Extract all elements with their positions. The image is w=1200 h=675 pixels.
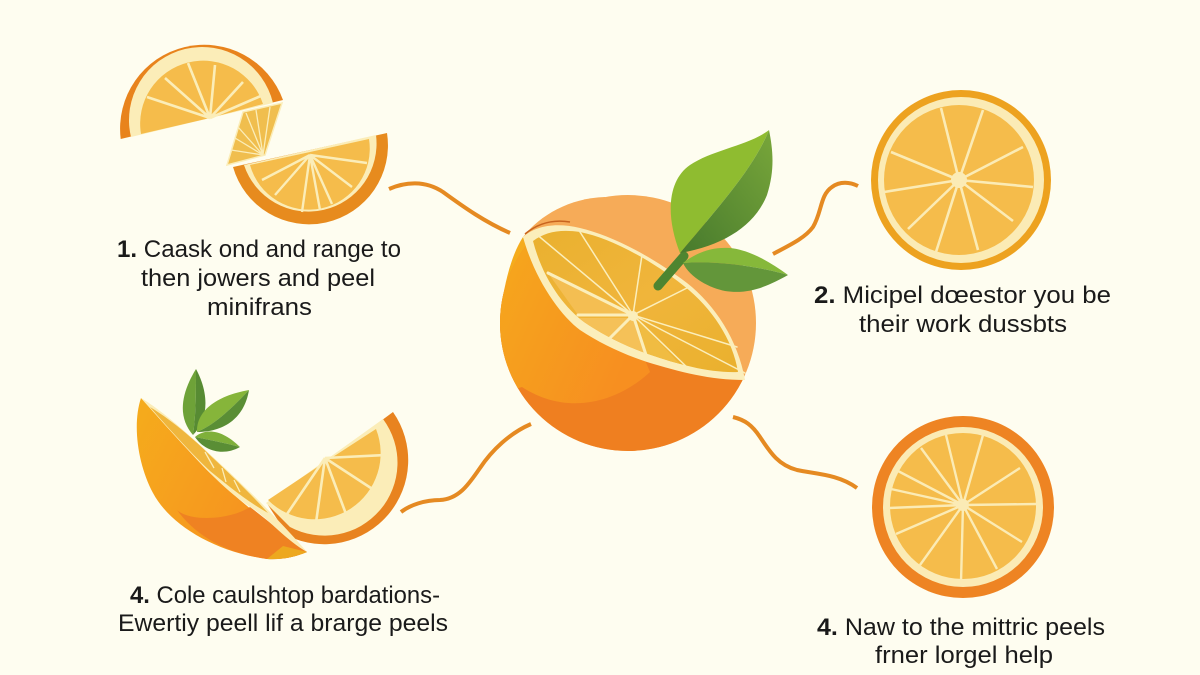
cut face flesh bbox=[533, 230, 738, 372]
text: step 3 caption: 4. Cole caulshtop bardations- bbox=[130, 582, 440, 609]
arrow: connector to step 4 bbox=[733, 417, 857, 488]
text: step 1 caption: then jowers and peel bbox=[141, 265, 375, 292]
small leaf bbox=[683, 248, 788, 292]
icon: central halved orange bbox=[500, 130, 788, 451]
text: step 4 caption: 4. Naw to the mittric peels bbox=[817, 614, 1105, 641]
text: step 2 caption bbox=[814, 282, 1111, 338]
rim shadow bbox=[525, 221, 570, 234]
text: step 4 caption: frner lorgel help bbox=[875, 642, 1053, 669]
segment membranes bbox=[535, 232, 745, 373]
text: step 1 caption: 1. Caask ond and range to bbox=[117, 236, 401, 263]
text: step 2 caption: 2. Micipel dœestor you be bbox=[814, 282, 1111, 309]
icon: step 4 orange wheel bbox=[872, 416, 1054, 598]
icon: lower half slice bbox=[233, 133, 388, 224]
icon: halved orange side view bbox=[137, 398, 307, 559]
text: step 1 caption bbox=[117, 236, 401, 321]
centre pith bbox=[628, 311, 638, 321]
panel: step 3 orange half and wedge bbox=[137, 369, 408, 559]
icon: upper half slice bbox=[120, 45, 283, 139]
text: step 3 caption bbox=[118, 582, 448, 637]
stem bbox=[658, 256, 684, 286]
text: step 4 caption bbox=[817, 614, 1105, 669]
arrow: connector from step 1 bbox=[389, 183, 510, 233]
text: step 3 caption: Ewertiy peell lif a brarge peels bbox=[118, 610, 448, 637]
shoulder fill behind cut tip bbox=[523, 197, 640, 240]
arrow: connector from step 3 bbox=[401, 424, 531, 512]
icon: step 2 orange wheel bbox=[871, 90, 1051, 270]
cut face pith bbox=[523, 225, 745, 380]
arrow: connector to step 2 bbox=[773, 183, 858, 254]
left shoulder fill bbox=[500, 237, 560, 323]
text: step 2 caption: their work dussbts bbox=[859, 311, 1067, 338]
text: step 1 caption: minifrans bbox=[207, 294, 312, 321]
panel: step 1 split orange slice bbox=[120, 45, 388, 224]
large leaf bbox=[671, 130, 772, 253]
orange body bbox=[500, 195, 756, 451]
icon: middle wedge bbox=[227, 103, 282, 165]
icon: small leaves bbox=[183, 369, 249, 452]
icon: orange slice wedge bbox=[266, 412, 408, 544]
